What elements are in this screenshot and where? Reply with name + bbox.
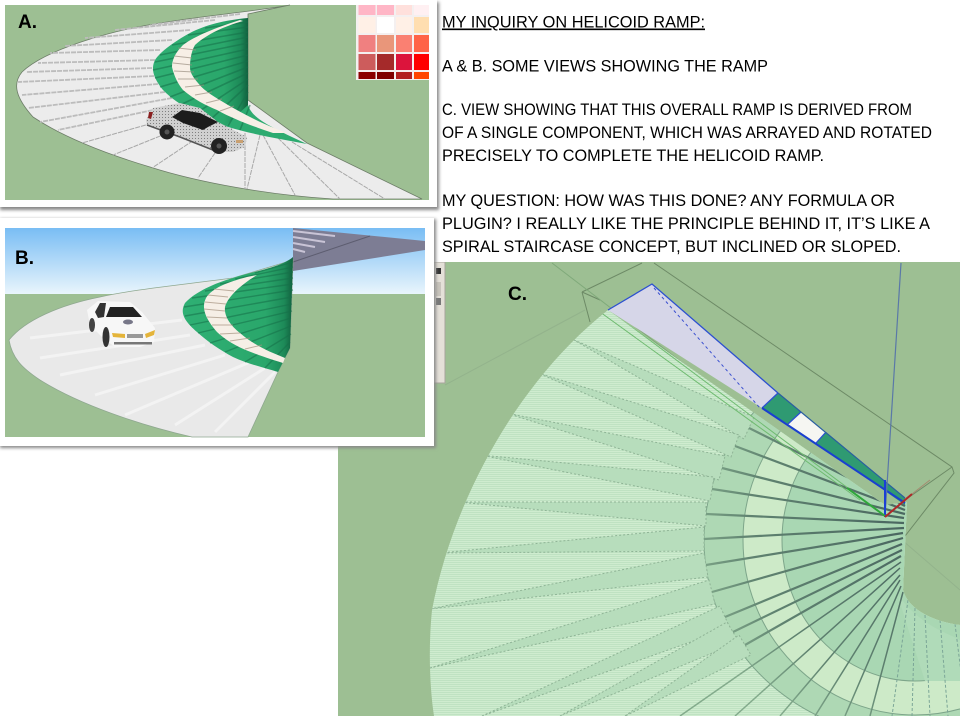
pale radial lines B (30, 320, 275, 432)
text block: inquiry (442, 14, 932, 256)
panel A: ramp top view (0, 0, 439, 210)
radial wedges (430, 340, 754, 716)
ramp fan surface (420, 280, 960, 720)
ramp radial lines A (18, 14, 385, 199)
green band A (153, 18, 250, 127)
toolbar fragment (432, 262, 445, 383)
white stripe A (172, 20, 287, 133)
wireframe bounding box (445, 260, 960, 590)
panel C: component view (338, 250, 960, 720)
green tail A (225, 105, 307, 144)
label C: C. (508, 284, 527, 305)
green band B (183, 257, 293, 372)
green band radial lines A (153, 22, 250, 130)
text block: inquiry: MY QUESTION: HOW WAS THIS DONE? ANY FORMULA OR (442, 192, 895, 210)
text block: inquiry: MY INQUIRY ON HELICOID RAMP: (442, 14, 705, 32)
text block: inquiry: SPIRAL STAIRCASE CONCEPT, BUT INCLINED OR SLOPED. (442, 238, 901, 256)
white stripe B (204, 275, 285, 363)
ramp surface B (9, 260, 293, 437)
text block: inquiry: C. VIEW SHOWING THAT THIS OVERALL RAMP IS DERIVED FROM (442, 101, 912, 119)
text block: inquiry: PRECISELY TO COMPLETE THE HELICOID RAMP. (442, 147, 824, 165)
radial lines (680, 428, 905, 716)
label A: A. (18, 12, 37, 33)
car B (87, 301, 155, 347)
color palette (356, 5, 429, 80)
stripe ticks B (204, 289, 262, 349)
text block background (434, 0, 960, 262)
panel B: ramp perspective view (0, 218, 436, 448)
ramp surface A (17, 5, 422, 199)
green band lines B (184, 262, 293, 368)
stripe ticks A (173, 48, 234, 111)
text block: inquiry: PLUGIN? I REALLY LIKE THE PRINCIPLE BEHIND IT, IT’S LIKE A (442, 215, 930, 233)
text block: inquiry: OF A SINGLE COMPONENT, WHICH WAS ARRAYED AND ROTATED (442, 124, 932, 142)
component wedge (608, 284, 905, 505)
axes (847, 263, 930, 517)
upper ramp B (293, 228, 425, 271)
label B: B. (15, 248, 34, 269)
car A (146, 103, 247, 154)
text block: inquiry: A & B. SOME VIEWS SHOWING THE RAMP (442, 58, 768, 76)
